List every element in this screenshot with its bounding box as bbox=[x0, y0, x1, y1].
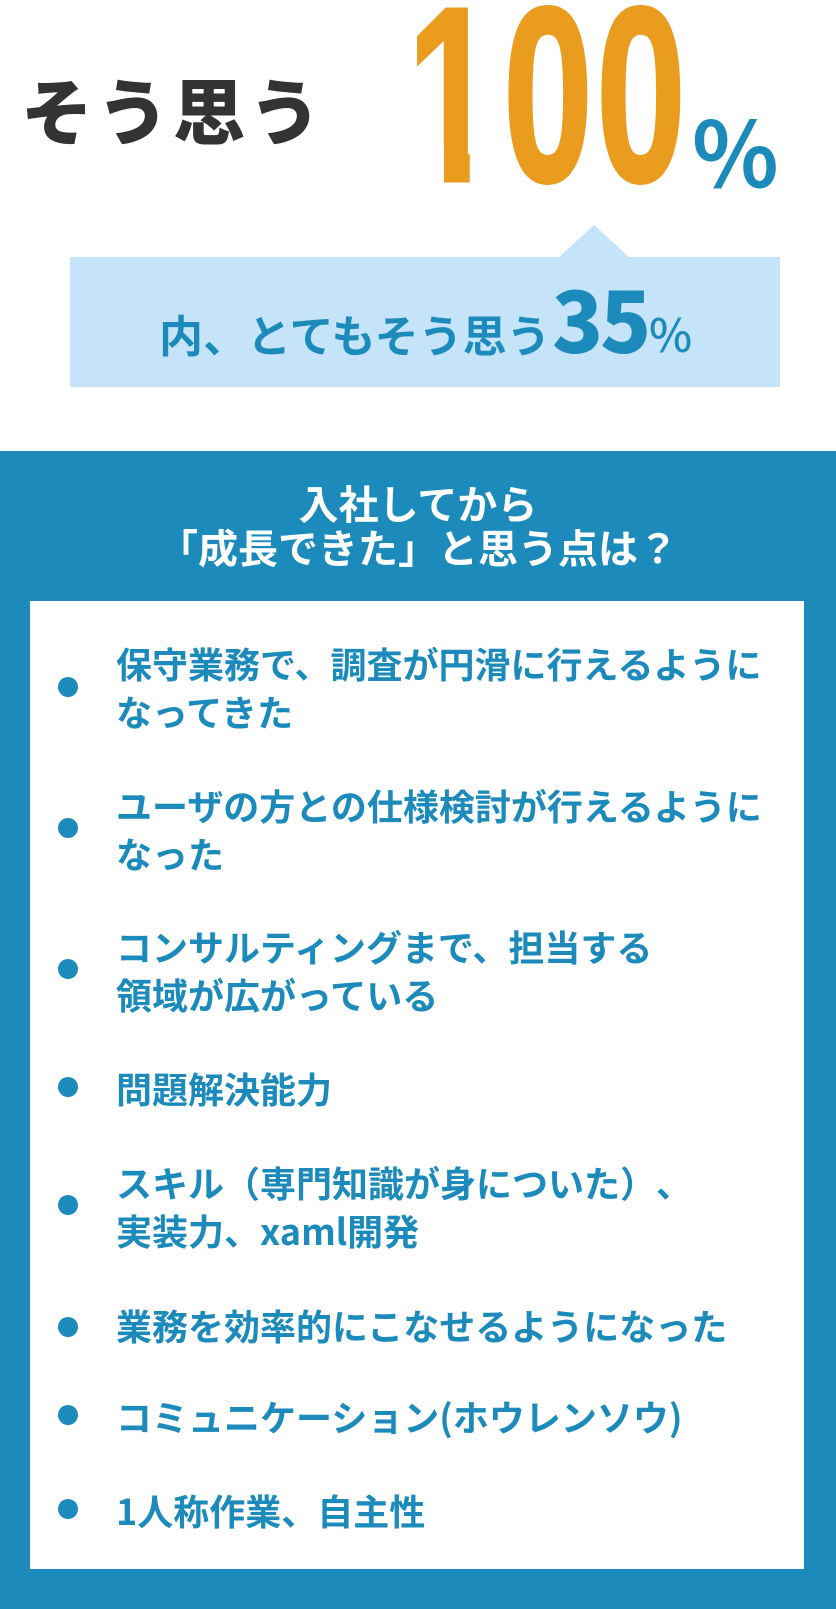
item text: 問題解決能力 bbox=[116, 1062, 332, 1114]
bullet bbox=[58, 1195, 78, 1215]
item text line 2: なった bbox=[116, 827, 224, 879]
panel heading: 「成長できた」と思う点は？ bbox=[158, 517, 678, 575]
heading: そう思う: そう思う bbox=[21, 55, 325, 160]
item text: 1人称作業、自主性 bbox=[116, 1484, 425, 1536]
callout number: 35: 35 bbox=[552, 257, 648, 378]
white list card bbox=[30, 601, 804, 1569]
bullet bbox=[58, 677, 78, 697]
callout pointer bbox=[559, 225, 629, 257]
item text: コンサルティングまで、担当する bbox=[116, 920, 652, 972]
panel heading: 入社してから bbox=[299, 473, 537, 531]
list item 3 bbox=[58, 920, 652, 1020]
list item 8 bbox=[58, 1484, 425, 1536]
panel: growth points bbox=[0, 451, 836, 1609]
item text: コミュニケーション(ホウレンソウ) bbox=[116, 1390, 682, 1442]
list item 7 bbox=[58, 1390, 682, 1442]
item text line 2: 領域が広がっている bbox=[116, 968, 438, 1020]
bullet bbox=[58, 1405, 78, 1425]
item text: スキル（専門知識が身についた）、 bbox=[116, 1156, 692, 1208]
item text: ユーザの方との仕様検討が行えるように bbox=[116, 779, 762, 831]
list item 2 bbox=[58, 779, 762, 879]
item text: 業務を効率的にこなせるようになった bbox=[116, 1299, 727, 1351]
item text line 2: 実装力、xaml開発 bbox=[116, 1204, 419, 1256]
list item 5 bbox=[58, 1156, 692, 1256]
callout box bbox=[70, 257, 780, 387]
list item 6 bbox=[58, 1299, 727, 1351]
big number: 100 bbox=[417, 0, 686, 234]
item text line 2: なってきた bbox=[116, 685, 293, 737]
callout percent sign: % bbox=[649, 300, 692, 366]
list item 4 bbox=[58, 1062, 332, 1114]
callout text: 内、とてもそう思う bbox=[159, 301, 551, 365]
bullet bbox=[58, 1317, 78, 1337]
bullet bbox=[58, 1499, 78, 1519]
item text: 保守業務で、調査が円滑に行えるように bbox=[116, 637, 761, 689]
callout: 内、とてもそう思う35% bbox=[70, 225, 780, 387]
list item 1 bbox=[58, 637, 761, 737]
bullet bbox=[58, 1077, 78, 1097]
bullet bbox=[58, 818, 78, 838]
bullet bbox=[58, 959, 78, 979]
panel heading bbox=[158, 473, 678, 575]
percent sign: 100: % bbox=[692, 83, 779, 213]
